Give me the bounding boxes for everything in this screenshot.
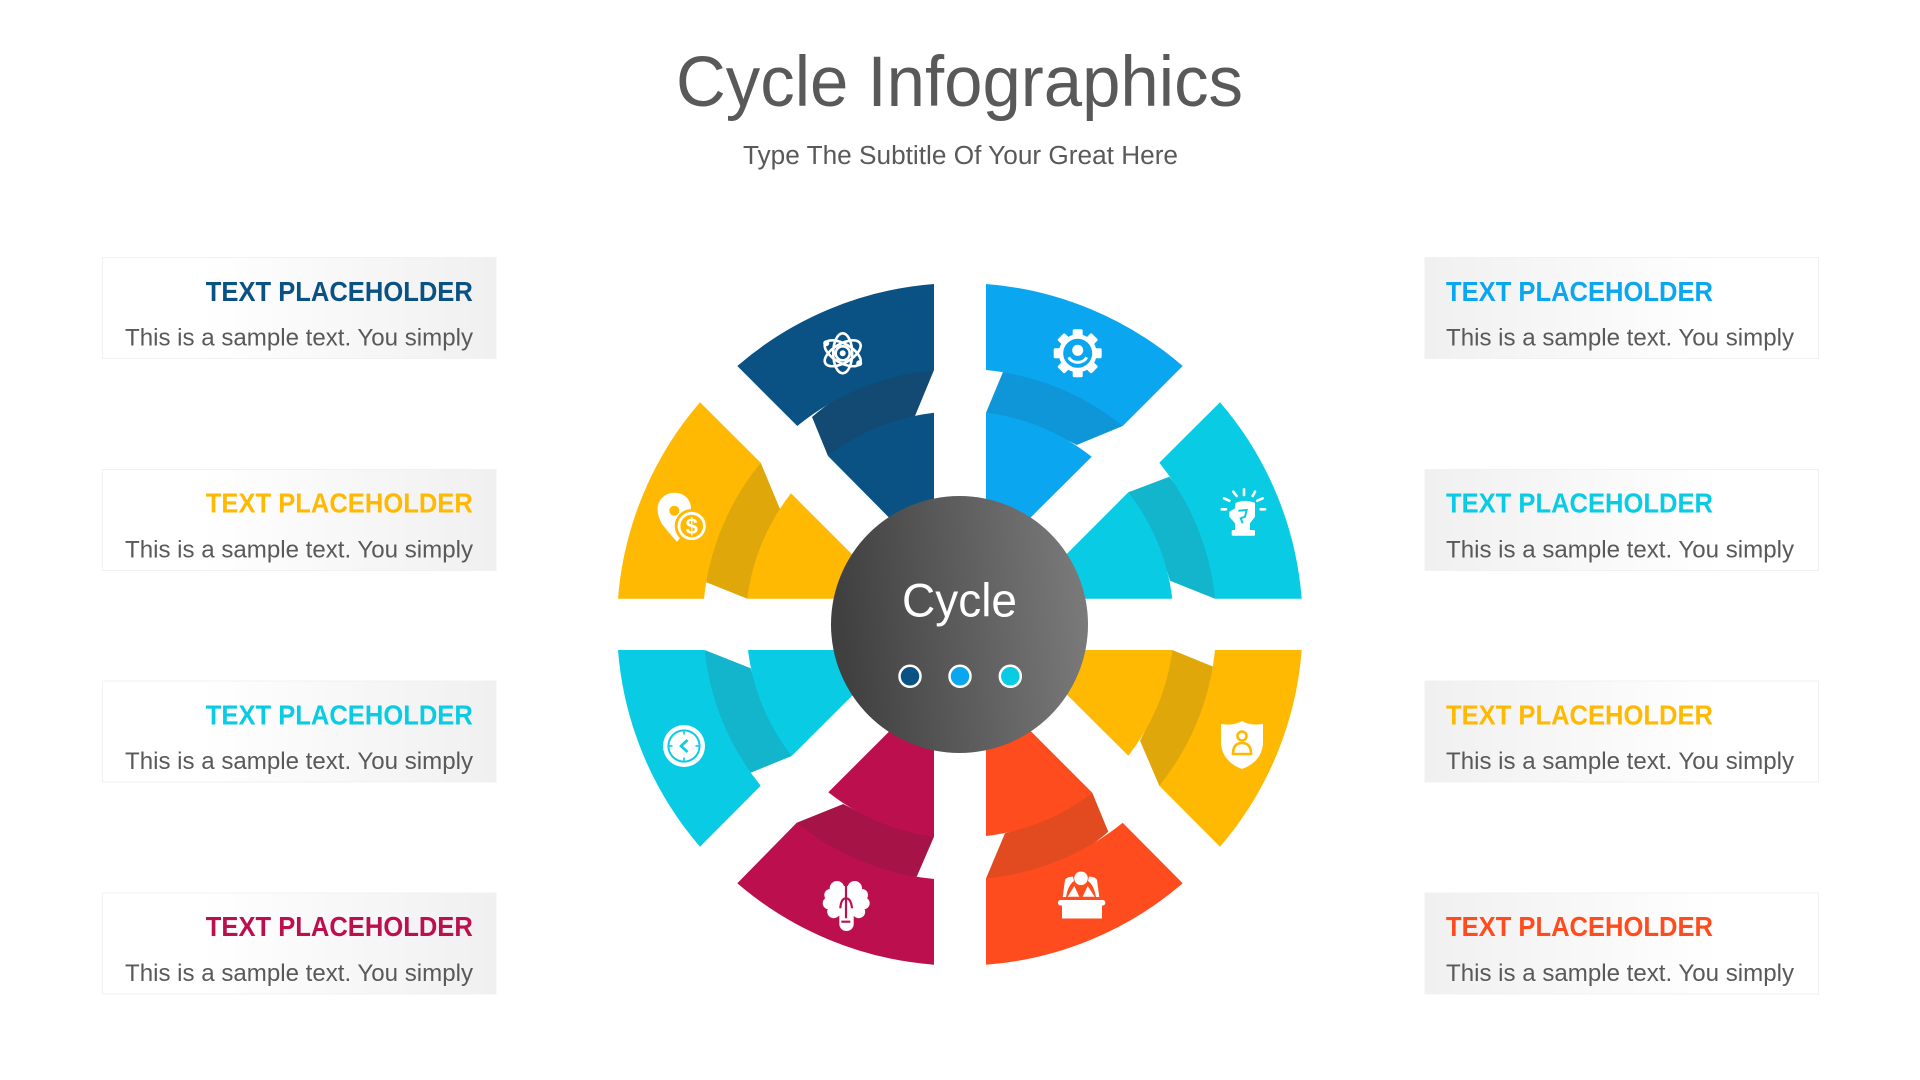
icon: clock (663, 725, 705, 767)
panel: left 3 cyan: TEXT PLACEHOLDER (206, 700, 473, 730)
cyan dot (1000, 666, 1021, 687)
icon: atom (821, 333, 865, 373)
center circle (831, 496, 1088, 753)
icon: gear with person (1054, 329, 1102, 377)
title: Cycle Infographics (676, 43, 1243, 122)
panel: right 2 cyan (1425, 470, 1818, 570)
segment: yellow right-lower (1022, 650, 1302, 847)
panel: left 1 navy (102, 258, 496, 358)
panel: left 1 navy: TEXT PLACEHOLDER (206, 276, 473, 307)
segment: navy top-left (737, 284, 934, 563)
segment: yellow left-upper (618, 402, 896, 599)
segment: cyan right-upper (1022, 402, 1302, 599)
panel: right 3 yellow: TEXT PLACEHOLDER (1446, 700, 1713, 730)
segment: orange bottom-right (986, 686, 1183, 965)
panel: right 3 yellow: This is a sample text. You simply (1446, 748, 1795, 775)
panel: left 3 cyan (102, 681, 496, 782)
segment: blue top-right (986, 284, 1183, 562)
panel: right 1 blue: This is a sample text. You simply (1446, 325, 1795, 352)
icon: location pin with dollar (658, 493, 709, 543)
segment: cyan left-lower (618, 650, 898, 847)
segment: magenta bottom-left (737, 687, 934, 965)
panel: left 1 navy: This is a sample text. You simply (125, 325, 474, 352)
blue dot (950, 666, 970, 687)
panel: right 2 cyan: TEXT PLACEHOLDER (1446, 488, 1713, 518)
panel: right 1 blue (1425, 258, 1818, 358)
icon: podium speaker (1058, 872, 1105, 918)
icon: shield with person (1221, 721, 1263, 769)
panel: right 1 blue: TEXT PLACEHOLDER (1446, 276, 1713, 307)
panel: left 3 cyan: This is a sample text. You simply (125, 748, 474, 775)
panel: left 2 yellow: This is a sample text. You simply (125, 537, 474, 564)
panel: left 2 yellow: TEXT PLACEHOLDER (206, 488, 473, 518)
icon: location pin with dollar: $ (686, 514, 698, 539)
panel: right 2 cyan: This is a sample text. You simply (1446, 537, 1795, 564)
panel: right 3 yellow (1425, 681, 1818, 782)
icon: fist with rays (1222, 489, 1265, 536)
panel: right 4 orange (1425, 893, 1818, 994)
panel: left 4 magenta (102, 893, 496, 994)
center label: Cycle (902, 574, 1017, 627)
panel: left 4 magenta: TEXT PLACEHOLDER (206, 911, 473, 942)
panel: left 2 yellow (102, 470, 496, 570)
panel: left 4 magenta: This is a sample text. You simply (125, 960, 474, 987)
subtitle: Type The Subtitle Of Your Great Here (743, 142, 1178, 170)
panel: right 4 orange: TEXT PLACEHOLDER (1446, 911, 1713, 942)
navy dot (900, 666, 920, 687)
icon: brain with arrow bulb (823, 881, 870, 931)
panel: right 4 orange: This is a sample text. You simply (1446, 960, 1795, 987)
